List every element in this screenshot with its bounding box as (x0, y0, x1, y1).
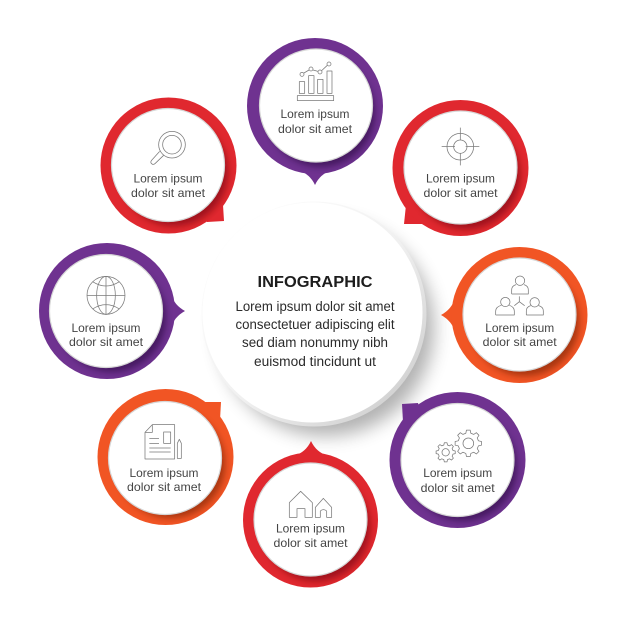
label: Lorem ipsum (280, 107, 350, 121)
label: dolor sit amet (483, 335, 557, 349)
label: Lorem ipsum (72, 321, 141, 335)
icon: target (442, 128, 479, 165)
ring shadow (416, 430, 520, 524)
label: dolor sit amet (274, 536, 348, 550)
central text block: euismod tincidunt ut (254, 354, 376, 369)
ring shadow (272, 78, 378, 170)
panel: left purple globe (39, 243, 185, 379)
central circle rim (202, 202, 426, 426)
ring with corner (100, 98, 236, 234)
icon: bar chart (297, 62, 334, 101)
ring with pointer (441, 247, 588, 383)
central circle face (202, 202, 422, 422)
panel: lower right purple gears (390, 392, 526, 528)
ring shadow (471, 268, 579, 376)
ring with pointer (243, 441, 378, 588)
ring shadow (117, 410, 225, 518)
label: Lorem ipsum (426, 172, 495, 186)
panel: top purple chart (247, 38, 383, 185)
label (127, 466, 202, 494)
label: Lorem ipsum (485, 321, 554, 335)
ring with pointer (247, 38, 383, 185)
label (421, 466, 495, 495)
central text block: Lorem ipsum dolor sit amet (236, 299, 395, 314)
ring with pointer (39, 243, 185, 379)
ring with corner (392, 100, 528, 236)
label (483, 321, 557, 349)
panel: top left red magnifier (100, 98, 236, 234)
ring with corner (390, 392, 526, 528)
ring shadow (416, 136, 524, 233)
label: dolor sit amet (127, 480, 202, 494)
label: dolor sit amet (424, 186, 498, 200)
label: dolor sit amet (131, 186, 206, 200)
white disc (260, 49, 372, 162)
panel: top right red target (392, 100, 528, 236)
white disc (463, 258, 576, 371)
ring shadow (66, 278, 170, 376)
central circle shadow (218, 220, 434, 436)
label: dolor sit amet (421, 481, 495, 495)
central text block: consectetuer adipiscing elit (236, 317, 395, 332)
label (274, 522, 348, 550)
icon: magnifier (151, 131, 185, 164)
ring with corner (98, 389, 234, 525)
label: Lorem ipsum (276, 522, 345, 536)
central text block: sed diam nonummy nibh (242, 335, 388, 350)
white disc (254, 463, 367, 576)
label: Lorem ipsum (130, 466, 199, 480)
label: Lorem ipsum (423, 466, 492, 480)
white disc (404, 111, 517, 224)
panel: lower left orange document (98, 389, 234, 525)
icon: globe (87, 276, 125, 314)
icon: gears (436, 430, 482, 462)
ring shadow (120, 118, 228, 226)
icon: document and pencil (145, 425, 181, 459)
ring shadow (266, 488, 374, 585)
panel: central circle (202, 202, 434, 436)
icon: people network (496, 276, 543, 315)
label (131, 172, 206, 200)
central text block (236, 299, 395, 369)
icon: houses (289, 491, 332, 517)
label (424, 172, 498, 200)
label: dolor sit amet (278, 122, 353, 136)
label (278, 107, 353, 136)
white disc (108, 402, 222, 514)
label (69, 321, 144, 349)
label: dolor sit amet (69, 335, 144, 349)
label: Lorem ipsum (134, 172, 203, 186)
heading: INFOGRAPHIC (258, 274, 373, 291)
white disc (401, 404, 514, 516)
white disc (112, 108, 224, 222)
panel: bottom red houses (243, 441, 378, 588)
panel: right orange people (441, 247, 588, 383)
white disc (50, 254, 162, 368)
